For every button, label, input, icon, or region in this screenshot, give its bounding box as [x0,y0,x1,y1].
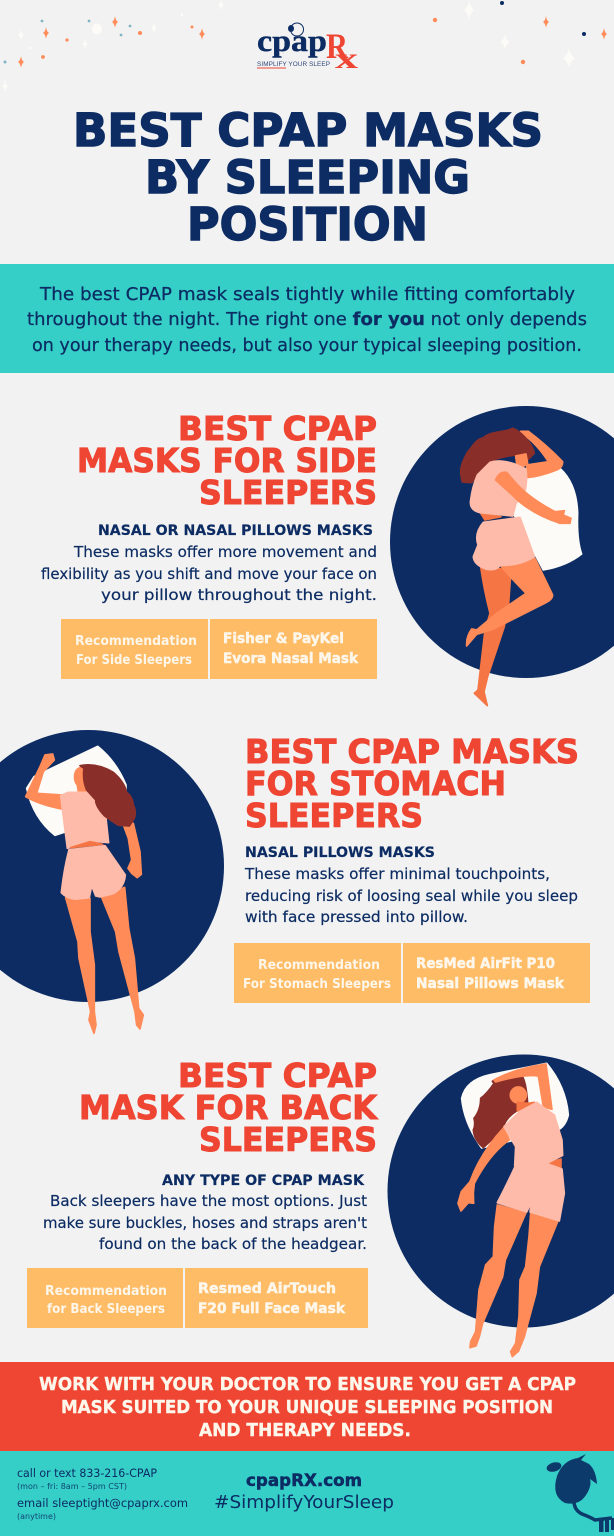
title: BEST CPAP MASKS [73,104,543,157]
icon: sheep [546,1454,614,1532]
decorative stars [2,0,607,92]
recommendation: side sleepers [61,619,377,679]
recommendation: side sleepers: For Side Sleepers [76,653,192,668]
text: stomach sleepers description: These masks offer minimal touchpoints, [244,865,550,883]
text: side sleepers description: flexibility as you shift and move your face on [41,565,377,583]
text: side sleepers description: your pillow throughout the night. [101,586,377,604]
illustration: back sleeper [388,1054,614,1357]
logo: cpapRX [257,23,358,75]
text: back sleepers description: found on the back of the headgear. [99,1235,367,1253]
illustration: side sleeper [390,406,614,706]
recommendation: stomach sleepers: For Stomach Sleepers [243,977,391,992]
contact details: email sleeptight@cpaprx.com [17,1496,188,1510]
contact details: call or text 833-216-CPAP [17,1466,157,1480]
logo: cpapRX: cpap [257,23,327,58]
recommendation: back sleepers: Recommendation [45,1284,167,1299]
heading: stomach sleepers [245,732,579,835]
recommendation: side sleepers: Recommendation [75,634,197,649]
heading: back sleepers [79,1056,378,1159]
heading: stomach sleepers: BEST CPAP MASKS [245,732,579,771]
heading: back sleepers: MASK FOR BACK [79,1088,378,1127]
text: stomach sleepers description: with face pressed into pillow. [245,908,468,926]
text: stomach sleepers description: NASAL PILLOWS MASKS [245,845,435,861]
intro band: The best CPAP mask seals tightly while fitting comfortably [39,284,575,305]
contact details: (anytime) [17,1512,56,1521]
footer band [0,1451,614,1536]
heading: side sleepers: MASKS FOR SIDE [77,441,377,480]
heading: back sleepers: SLEEPERS [199,1120,377,1159]
text: back sleepers description: ANY TYPE OF CPAP MASK [162,1173,365,1189]
recommendation: side sleepers: Fisher & PayKel [223,631,344,647]
text: stomach sleepers description: reducing risk of loosing seal while you sleep [245,887,578,905]
logo: cpapRX: R [326,26,349,66]
recommendation: back sleepers [27,1268,368,1328]
recommendation: stomach sleepers: Recommendation [258,958,380,973]
website and hashtag [214,1471,394,1513]
title: POSITION [187,198,428,251]
heading: side sleepers: BEST CPAP [178,409,377,448]
recommendation: back sleepers: Resmed AirTouch [198,1281,336,1297]
heading: stomach sleepers: SLEEPERS [245,796,423,835]
intro band: throughout the night. The right one for you not only depends [27,309,587,330]
title: BY SLEEPING [145,151,470,204]
heading: side sleepers [77,409,377,512]
contact details: (mon – fri: 8am – 5pm CST) [17,1482,127,1491]
recommendation: back sleepers: F20 Full Face Mask [198,1301,346,1317]
text: side sleepers description: These masks offer more movement and [73,543,377,561]
recommendation: stomach sleepers: Nasal Pillows Mask [416,976,565,992]
text: back sleepers description: make sure buckles, hoses and straps aren't [43,1214,367,1232]
heading: side sleepers: SLEEPERS [199,473,377,512]
callout band: AND THERAPY NEEDS. [199,1420,411,1441]
heading: stomach sleepers: FOR STOMACH [245,764,506,803]
text: back sleepers description [43,1173,367,1253]
panel: stomach sleepers [0,730,590,1033]
intro band: on your therapy needs, but also your typical sleeping position. [32,335,582,356]
recommendation: stomach sleepers: ResMed AirFit P10 [416,956,555,972]
illustration: stomach sleeper [0,730,224,1033]
title [73,104,543,251]
recommendation: back sleepers: for Back Sleepers [47,1302,165,1317]
text: stomach sleepers description [244,845,578,926]
website and hashtag: #SimplifyYourSleep [214,1492,394,1513]
text: back sleepers description: Back sleepers have the most options. Just [50,1192,367,1210]
recommendation: side sleepers: Evora Nasal Mask [223,651,359,667]
contact details [17,1466,188,1521]
website and hashtag: cpapRX.com [246,1471,362,1491]
intro band [0,264,614,373]
text: side sleepers description: NASAL OR NASAL PILLOWS MASKS [98,523,373,539]
panel: back sleepers [27,1054,614,1357]
logo: cpapRX: SIMPLIFY YOUR SLEEP [257,61,330,68]
recommendation: stomach sleepers [234,943,590,1003]
heading: back sleepers: BEST CPAP [178,1056,377,1095]
callout band: WORK WITH YOUR DOCTOR TO ENSURE YOU GET A CPAP [39,1374,576,1395]
callout band [0,1362,614,1451]
logo: cpapRX: x [335,42,358,75]
callout band: MASK SUITED TO YOUR UNIQUE SLEEPING POSITION [61,1397,553,1418]
text: side sleepers description [41,523,377,604]
panel: side sleepers [41,406,614,706]
